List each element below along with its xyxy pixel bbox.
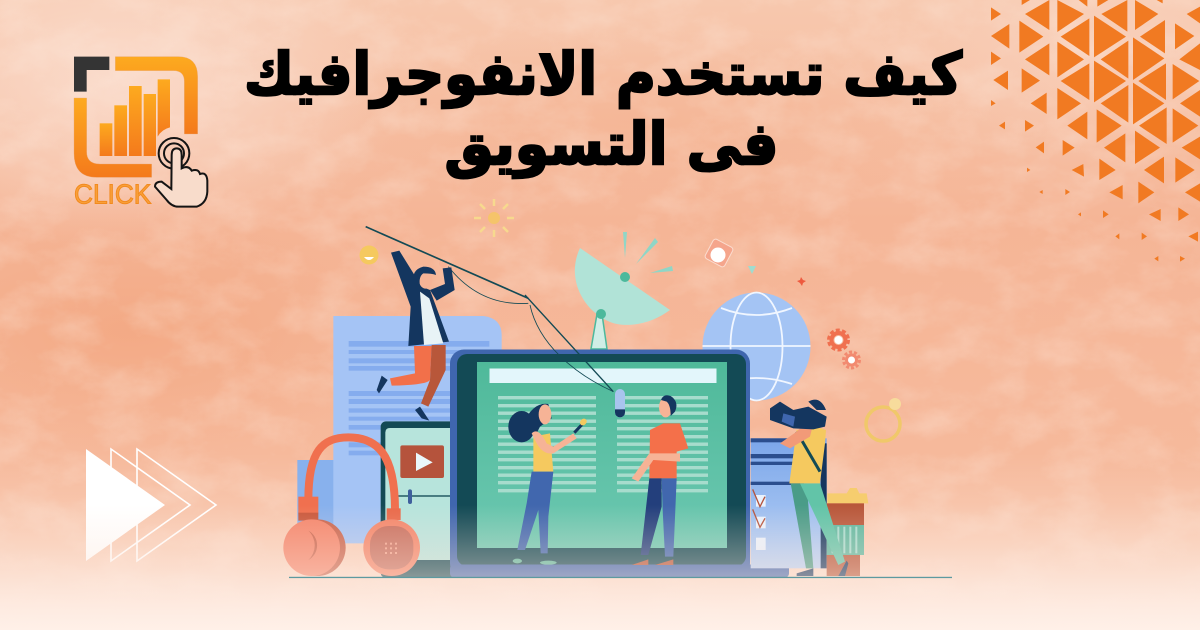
icon: light bulb (360, 246, 378, 264)
small decorations (360, 199, 901, 441)
logo bars (100, 79, 170, 156)
title (244, 40, 962, 179)
logo dark corner (74, 57, 109, 92)
decorative triangle pattern, top right (991, 0, 1200, 262)
icon: gears (828, 330, 860, 368)
globe (702, 292, 810, 400)
icon: star (797, 277, 806, 286)
video player card (381, 421, 457, 578)
logo hand cursor (155, 138, 207, 207)
icon: sun (474, 199, 514, 237)
play arrows (86, 449, 216, 561)
headphones (283, 437, 420, 576)
boom pole and cables (366, 227, 613, 392)
bottom fade overlay (0, 505, 1200, 630)
icon: ring (866, 398, 901, 441)
illustration: media marketing (0, 199, 1200, 630)
ground line (289, 577, 952, 578)
person holding boom pole (366, 227, 613, 421)
logo: click (74, 57, 207, 209)
screen text lines (498, 396, 708, 492)
laptop base (450, 564, 789, 578)
man and microphone (615, 389, 688, 565)
icon: diamond (748, 266, 756, 274)
title line 1: كيف تستخدم الانفوجرافيك (244, 40, 962, 109)
logo word: CLICK (74, 178, 151, 209)
icon: clock (704, 238, 734, 268)
logo orange frame (74, 57, 198, 177)
laptop (450, 350, 789, 578)
woman with microphone (508, 404, 588, 565)
laptop screen (477, 362, 727, 548)
screen header bar (490, 368, 716, 383)
coffee cup (827, 488, 868, 576)
document sheets (297, 316, 502, 543)
checklist panel (751, 438, 827, 568)
hanging microphone (615, 389, 625, 417)
satellite dish (575, 232, 673, 349)
title line 2: فى التسويق (444, 110, 778, 179)
cameraman (770, 400, 848, 576)
